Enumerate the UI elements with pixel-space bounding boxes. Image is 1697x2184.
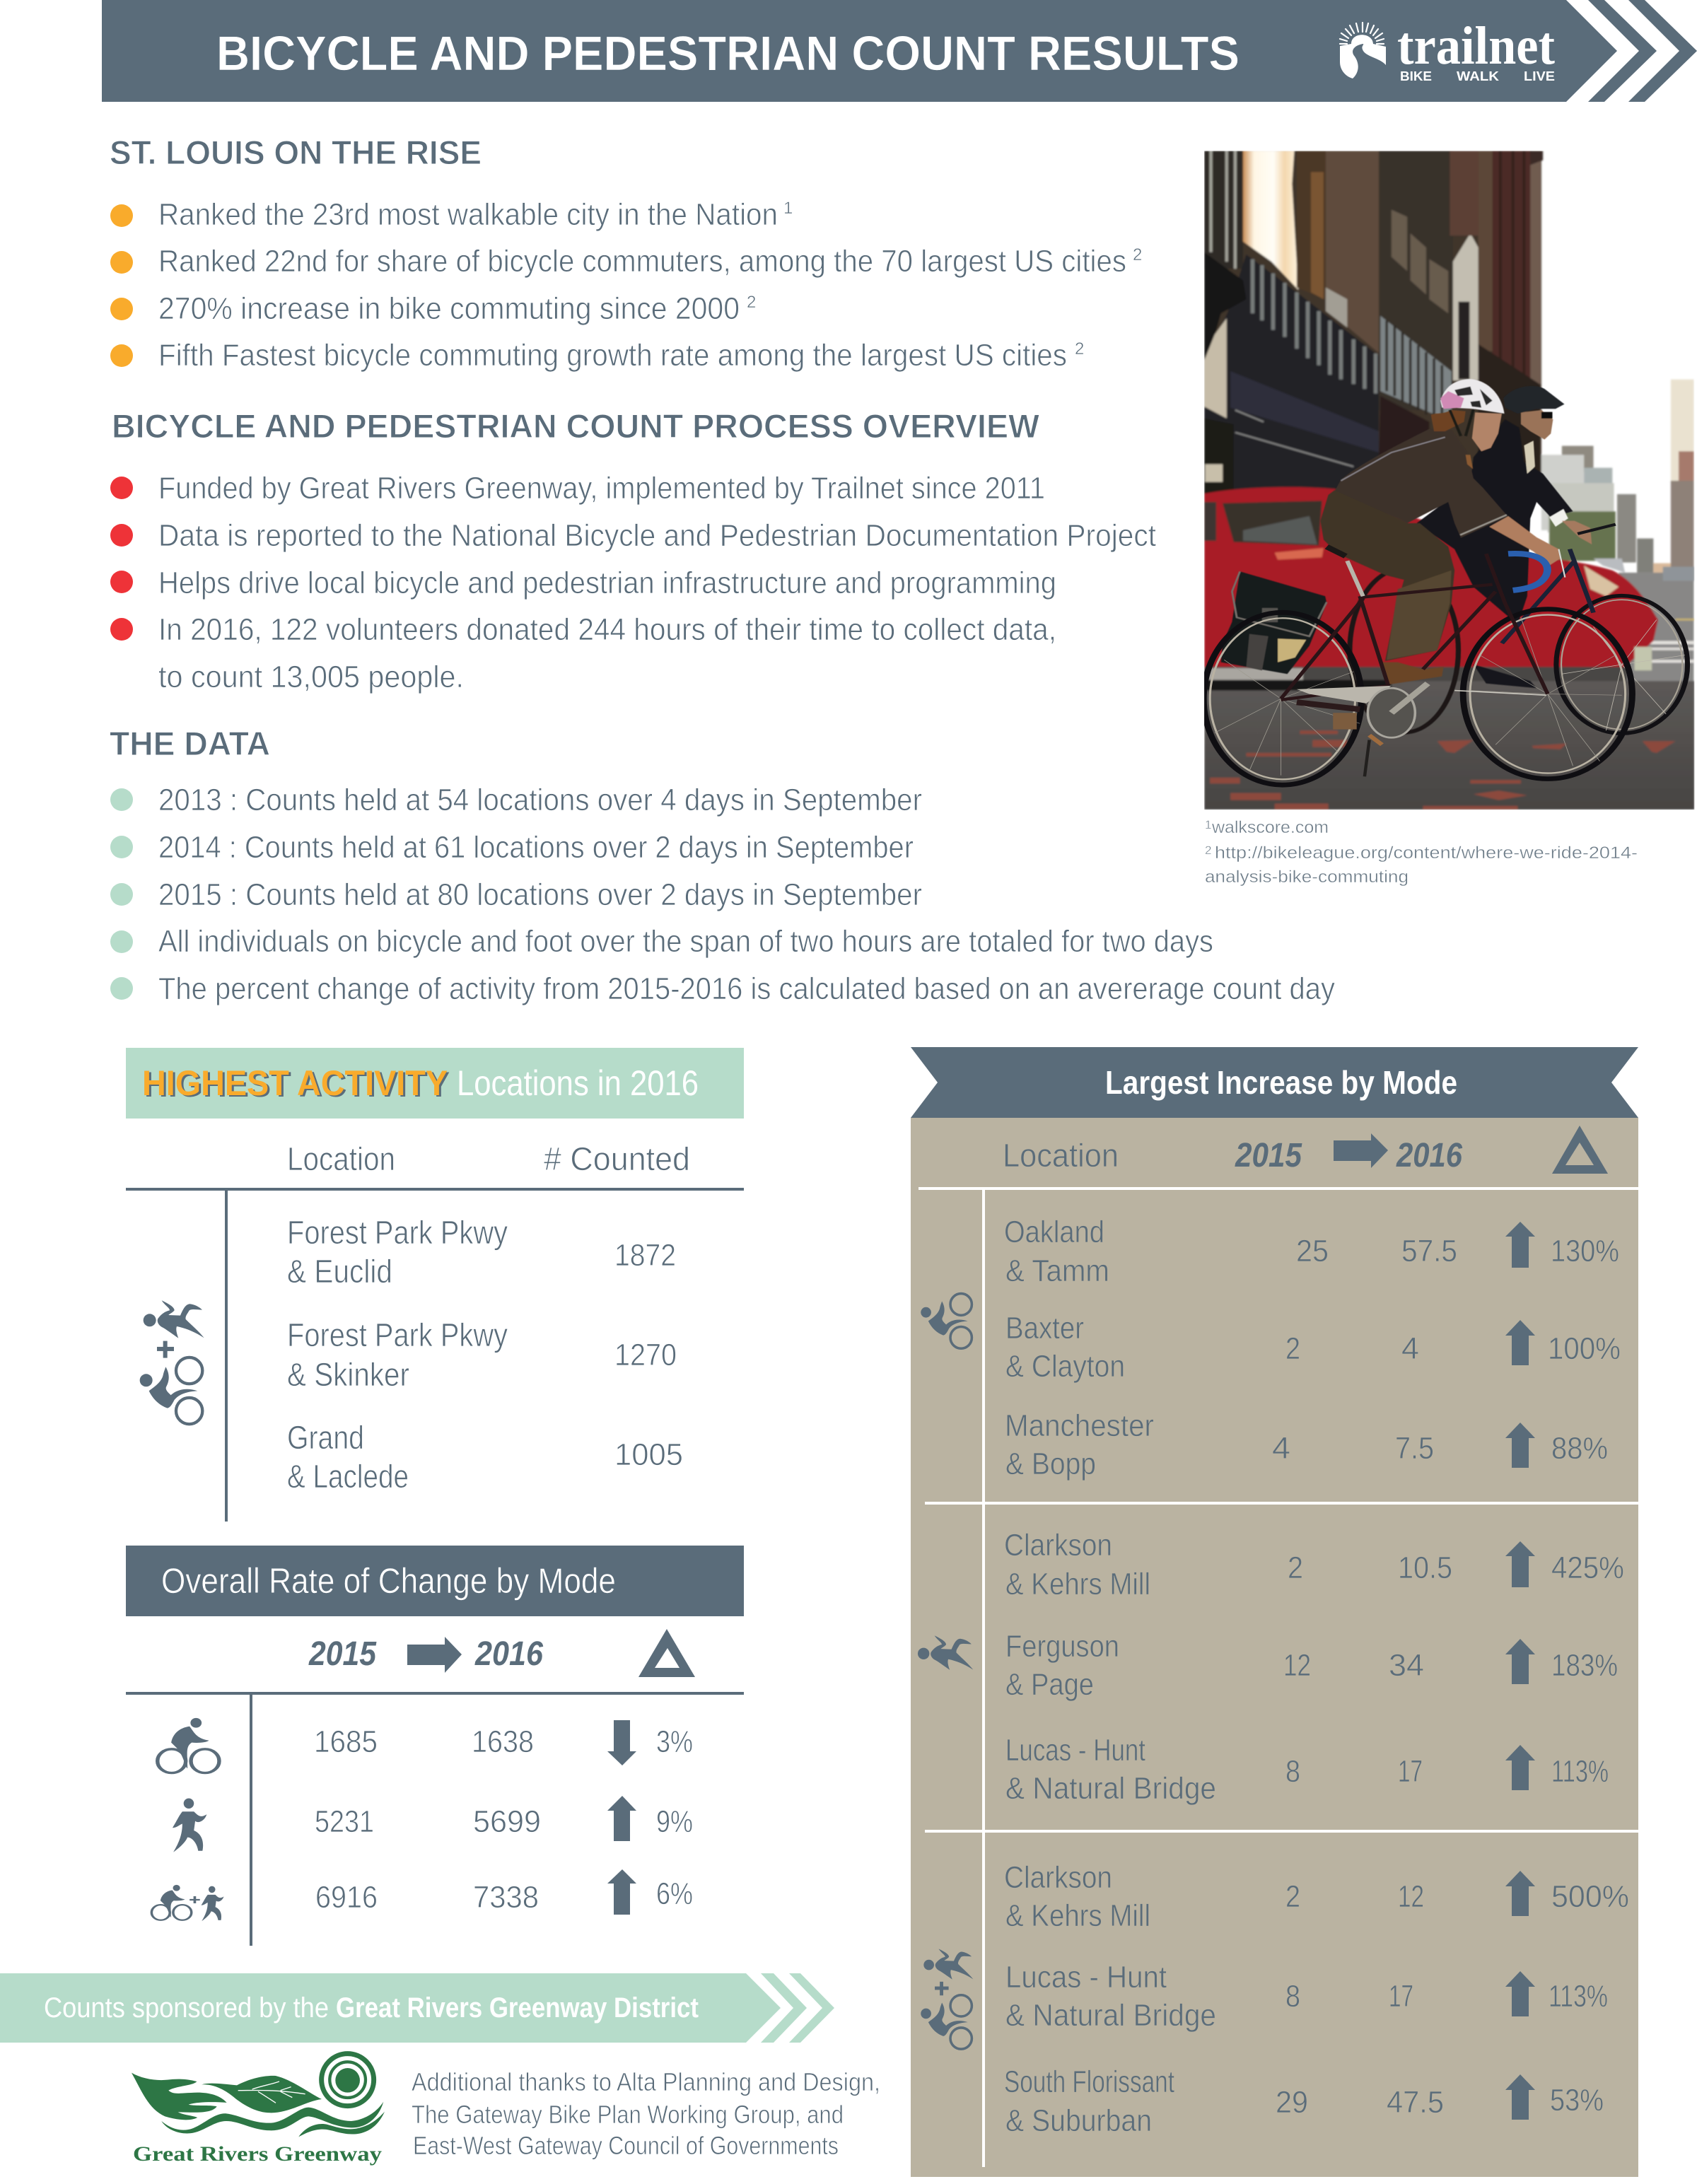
row: Lucas-Hunt and Natural Bridge <box>1005 1960 1608 2033</box>
bullets list: The percent change of activity from 2015-2016 is calculated based on an avererage count day <box>158 971 1335 1006</box>
lower facade with balcony <box>1204 255 1379 502</box>
footnotes <box>1205 818 1638 887</box>
row: Lucas-Hunt and Natural Bridge: 17 <box>1398 1754 1423 1789</box>
red car <box>1204 487 1658 667</box>
logo: Great Rivers Greenway: Great Rivers Greenway <box>133 2142 382 2166</box>
row: Manchester and Bopp: Manchester <box>1005 1408 1154 1443</box>
row: Clarkson and Kehrs Mill: Clarkson <box>1004 1860 1112 1895</box>
woman's bicycle <box>1463 609 1632 779</box>
column headings: 2016 <box>1396 1137 1462 1174</box>
bullets list: In 2016, 122 volunteers donated 244 hours of their time to collect data, <box>158 612 1056 647</box>
sponsor banner <box>0 1973 834 2043</box>
row: South Florissant and Suburban: South Florissant <box>1004 2065 1174 2099</box>
row: Clarkson and Kehrs Mill: 425% <box>1551 1551 1624 1585</box>
row: Grand and Laclede: & Laclede <box>287 1458 409 1495</box>
row: Forest Park Pkwy and Skinker: Forest Park Pkwy <box>287 1316 508 1353</box>
bullets list: Ranked 22nd for share of bicycle commuters, among the 70 largest US cities <box>158 244 1126 279</box>
group: pedestrian <box>918 1528 1624 1806</box>
panel header: HIGHEST ACTIVITY <box>142 1063 448 1103</box>
panel header: HIGHEST ACTIVITY <box>144 1065 450 1104</box>
row: South Florissant and Suburban <box>1004 2065 1604 2138</box>
icon: bicycle plus pedestrian <box>151 1885 224 1921</box>
row: Clarkson and Kehrs Mill <box>1004 1528 1624 1601</box>
footnotes: analysis-bike-commuting <box>1205 868 1409 887</box>
row: Forest Park Pkwy and Euclid: Forest Park Pkwy <box>287 1214 508 1251</box>
footnotes: 1 <box>1205 818 1211 831</box>
acknowledgements text: The Gateway Bike Plan Working Group, and <box>412 2100 844 2129</box>
row: Lucas-Hunt and Natural Bridge: & Natural Bridge <box>1005 1771 1216 1806</box>
trailnet logo: trailnet <box>1397 16 1555 76</box>
sponsor text: Counts sponsored by the <box>44 1992 329 2024</box>
logo: Great Rivers Greenway <box>132 2054 385 2166</box>
row: bicycle: 1638 <box>472 1724 534 1759</box>
row: Forest Park Pkwy and Skinker: 1270 <box>614 1338 677 1372</box>
ribbon header <box>911 1047 1638 1118</box>
row: Lucas-Hunt and Natural Bridge <box>1005 1733 1609 1806</box>
column headings: 2015 <box>1235 1137 1302 1174</box>
row: South Florissant and Suburban: 53% <box>1550 2083 1604 2118</box>
row: Lucas-Hunt and Natural Bridge: 8 <box>1285 1979 1300 2014</box>
bullets list: 2014 : Counts held at 61 locations over 2 days in September <box>158 830 914 865</box>
row: Forest Park Pkwy and Euclid: & Euclid <box>287 1253 392 1290</box>
bullets list <box>110 783 1335 1006</box>
group: bicycle plus pedestrian <box>921 1860 1629 2138</box>
heading: ST. LOUIS ON THE RISE <box>110 134 482 171</box>
man's rear wheel <box>1350 568 1458 732</box>
row: Baxter and Clayton: & Clayton <box>1005 1349 1125 1384</box>
bullets list: 2013 : Counts held at 54 locations over 4 days in September <box>158 783 922 817</box>
heading: THE DATA <box>110 725 270 762</box>
acknowledgements text: Additional thanks to Alta Planning and Design, <box>412 2067 880 2096</box>
ribbon header: Largest Increase by Mode <box>1105 1064 1457 1101</box>
row: pedestrian: 9% <box>656 1804 693 1839</box>
row: Lucas-Hunt and Natural Bridge: Lucas - Hunt <box>1005 1960 1167 1995</box>
building base <box>1204 151 1541 500</box>
brown wall <box>1326 151 1380 354</box>
man cyclist <box>1417 419 1573 624</box>
panel header: Locations in 2016 <box>457 1063 699 1103</box>
row: Oakland and Tamm: 57.5 <box>1401 1234 1457 1268</box>
row: Ferguson and Page: 34 <box>1389 1648 1424 1683</box>
row: combined: 6916 <box>315 1880 378 1915</box>
distant buildings and street <box>1562 446 1594 472</box>
row: Ferguson and Page <box>1005 1629 1618 1702</box>
column headings: 2015 <box>308 1635 377 1673</box>
row: Forest Park Pkwy and Skinker: & Skinker <box>287 1356 409 1393</box>
trailnet logo: WALK <box>1457 69 1499 83</box>
bright sunlit facade <box>1243 151 1298 290</box>
column headings: # Counted <box>544 1140 690 1177</box>
header banner <box>102 0 1697 102</box>
row: Grand and Laclede: 1005 <box>614 1437 683 1472</box>
row: Forest Park Pkwy and Euclid: 1872 <box>614 1238 676 1273</box>
panel: largest increase by mode <box>911 1047 1638 2177</box>
row: Oakland and Tamm <box>1004 1215 1619 1288</box>
trailnet logo: LIVE <box>1524 69 1555 83</box>
bullets list: Fifth Fastest bicycle commuting growth rate among the largest US cities <box>158 338 1067 373</box>
stone pillar <box>1453 233 1479 380</box>
row: Manchester and Bopp: 7.5 <box>1395 1431 1434 1466</box>
arrow: up <box>607 1796 636 1841</box>
panel header <box>126 1546 744 1616</box>
bullets list: 2 <box>747 293 756 312</box>
row: Forest Park Pkwy and Euclid <box>287 1214 676 1290</box>
chevrons <box>1588 0 1697 102</box>
icon: pedestrian <box>173 1799 206 1852</box>
pannier bag <box>1221 571 1326 674</box>
title: BICYCLE AND PEDESTRIAN COUNT RESULTS <box>216 26 1240 81</box>
ornate column <box>1379 151 1453 410</box>
row: combined <box>151 1869 693 1921</box>
photo: two cyclists on a city street <box>1203 151 1694 810</box>
acknowledgements text <box>412 2067 880 2160</box>
row: Clarkson and Kehrs Mill <box>1004 1860 1629 1933</box>
row: Lucas-Hunt and Natural Bridge: 113% <box>1549 1979 1608 2014</box>
bicycles <box>1203 525 1688 785</box>
section: St. Louis on the rise <box>110 134 1142 373</box>
row: Lucas-Hunt and Natural Bridge: & Natural Bridge <box>1005 1998 1216 2033</box>
row: pedestrian: 5231 <box>315 1804 374 1839</box>
row: pedestrian <box>173 1796 693 1852</box>
road <box>1204 665 1628 683</box>
bullets list: Funded by Great Rivers Greenway, implemented by Trailnet since 2011 <box>158 471 1045 506</box>
bullets list: 2015 : Counts held at 80 locations over 2 days in September <box>158 877 922 912</box>
panel header <box>126 1048 744 1119</box>
row: Lucas-Hunt and Natural Bridge: 8 <box>1285 1754 1300 1789</box>
row: South Florissant and Suburban: & Suburban <box>1005 2103 1152 2138</box>
chevrons <box>761 1973 834 2043</box>
column headings: 2016 <box>474 1635 543 1673</box>
icon: pedestrian plus bicycle <box>140 1300 204 1424</box>
row: bicycle: 3% <box>656 1724 693 1759</box>
row: Clarkson and Kehrs Mill: 2 <box>1288 1551 1303 1585</box>
bullets list: Helps drive local bicycle and pedestrian infrastructure and programming <box>158 566 1056 600</box>
row: Clarkson and Kehrs Mill: & Kehrs Mill <box>1005 1567 1150 1601</box>
icon: pedestrian <box>918 1635 973 1670</box>
footnotes: walkscore.com <box>1211 818 1329 837</box>
row: Oakland and Tamm: 130% <box>1551 1234 1619 1268</box>
row: Manchester and Bopp <box>1005 1408 1608 1481</box>
row: Baxter and Clayton: 4 <box>1401 1331 1419 1366</box>
row: combined: 7338 <box>473 1880 539 1915</box>
icon: bicycle <box>158 1718 219 1773</box>
right wall <box>1450 151 1479 235</box>
bullets list: Ranked the 23rd most walkable city in the Nation <box>158 197 778 232</box>
bullets list: Data is reported to the National Bicycle and Pedestrian Documentation Project <box>158 518 1156 553</box>
woman cyclist <box>1334 429 1508 538</box>
row: Grand and Laclede: Grand <box>287 1419 364 1456</box>
row: combined: 6% <box>656 1876 693 1911</box>
row: Ferguson and Page: 183% <box>1551 1648 1618 1683</box>
left windows <box>1204 151 1243 269</box>
row: Clarkson and Kehrs Mill: & Kehrs Mill <box>1005 1898 1150 1933</box>
row: Grand and Laclede <box>287 1419 683 1495</box>
row: bicycle <box>158 1718 693 1773</box>
icon: bicycle <box>921 1294 972 1348</box>
sponsor banner: Great Rivers Greenway District <box>336 1992 699 2024</box>
row: Lucas-Hunt and Natural Bridge: 113% <box>1551 1754 1609 1789</box>
panel: highest activity locations <box>126 1048 744 1522</box>
row: Oakland and Tamm: 25 <box>1296 1234 1329 1268</box>
row: Manchester and Bopp: 88% <box>1551 1431 1608 1466</box>
row: Ferguson and Page: Ferguson <box>1005 1629 1119 1664</box>
row: Lucas-Hunt and Natural Bridge: Lucas - Hunt <box>1005 1733 1145 1768</box>
arrow: up <box>607 1869 636 1915</box>
group: bicycle <box>921 1215 1621 1481</box>
row: Oakland and Tamm: & Tamm <box>1005 1254 1109 1288</box>
row: Manchester and Bopp: & Bopp <box>1005 1447 1096 1481</box>
row: Baxter and Clayton <box>1005 1311 1621 1384</box>
column headings: Location <box>1003 1137 1119 1174</box>
row: Baxter and Clayton: 2 <box>1285 1331 1300 1366</box>
section: the data <box>110 725 1335 1006</box>
row: Clarkson and Kehrs Mill: 2 <box>1285 1879 1300 1914</box>
trailnet logo: BIKE <box>1400 69 1432 83</box>
bullets list: All individuals on bicycle and foot over the span of two hours are totaled for two days <box>158 924 1213 959</box>
row: Lucas-Hunt and Natural Bridge: 17 <box>1389 1979 1413 2014</box>
column headings <box>287 1140 690 1177</box>
bullets list: 270% increase in bike commuting since 2000 <box>158 291 740 326</box>
row: Manchester and Bopp: 4 <box>1272 1431 1290 1466</box>
arrow: down <box>607 1720 636 1765</box>
bullets list: 2 <box>1075 339 1084 358</box>
row: Clarkson and Kehrs Mill: Clarkson <box>1004 1528 1112 1563</box>
row: Clarkson and Kehrs Mill: 10.5 <box>1398 1551 1452 1585</box>
column headings <box>1003 1126 1608 1174</box>
panel header: Overall Rate of Change by Mode <box>161 1561 616 1601</box>
column headings: Location <box>287 1140 395 1177</box>
bullets list <box>110 471 1156 694</box>
bullets list <box>110 197 1142 373</box>
row: pedestrian: 5699 <box>473 1804 541 1839</box>
bullets list: to count 13,005 people. <box>158 660 464 694</box>
row: Baxter and Clayton: 100% <box>1548 1331 1621 1366</box>
row: Ferguson and Page: 12 <box>1283 1648 1311 1683</box>
man's bicycle <box>1556 596 1688 733</box>
trailnet logo <box>1340 16 1555 83</box>
acknowledgements text: East-West Gateway Council of Governments <box>413 2131 839 2160</box>
footnotes: 2 <box>1205 843 1211 857</box>
row: South Florissant and Suburban: 29 <box>1276 2085 1308 2120</box>
row: Baxter and Clayton: Baxter <box>1005 1311 1084 1345</box>
row: Clarkson and Kehrs Mill: 500% <box>1551 1879 1629 1914</box>
row: Oakland and Tamm: Oakland <box>1004 1215 1104 1249</box>
icon: pedestrian plus bicycle <box>921 1949 973 2049</box>
row: Clarkson and Kehrs Mill: 12 <box>1398 1879 1424 1914</box>
row: Forest Park Pkwy and Skinker <box>287 1316 677 1393</box>
row: Ferguson and Page: & Page <box>1005 1667 1094 1702</box>
panel: overall rate of change by mode <box>126 1546 744 1946</box>
section: count process overview <box>110 407 1156 694</box>
row: South Florissant and Suburban: 47.5 <box>1387 2085 1444 2120</box>
bullets list: 2 <box>1133 245 1142 264</box>
heading: BICYCLE AND PEDESTRIAN COUNT PROCESS OVERVIEW <box>112 407 1040 445</box>
column headings <box>308 1629 695 1677</box>
bullets list: 1 <box>783 199 793 218</box>
row: bicycle: 1685 <box>314 1724 378 1759</box>
footnotes: http://bikeleague.org/content/where-we-ride-2014- <box>1215 843 1638 863</box>
